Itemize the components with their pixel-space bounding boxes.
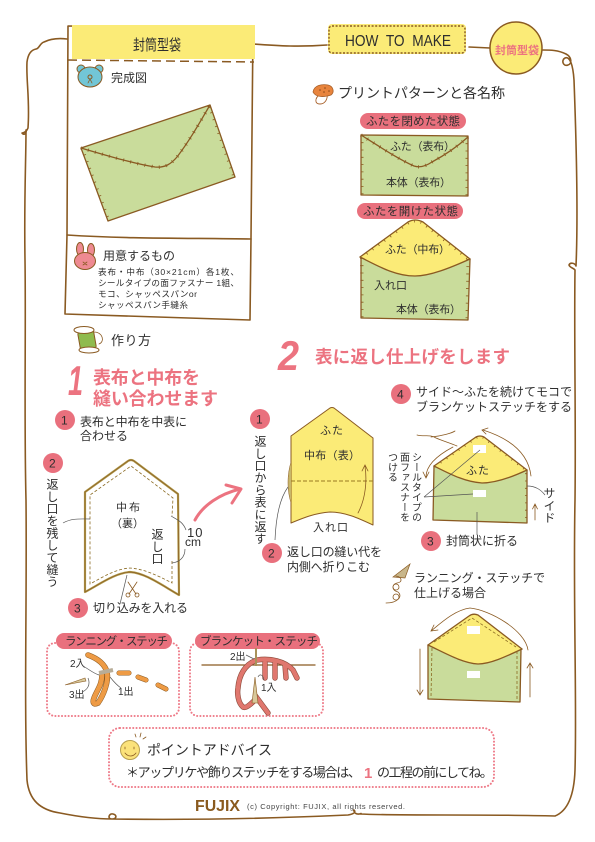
materials list: 表布・中布（30×21cm）各1枚、 xyxy=(98,266,239,277)
icon: thread spool xyxy=(74,326,102,353)
panel: materials and finished view xyxy=(65,25,255,320)
diagram: flap open xyxy=(360,220,470,320)
panel: blanket stitch: 1入 xyxy=(261,683,277,694)
step 1-3 instruction xyxy=(68,598,188,618)
panel: point advice: 1 xyxy=(364,765,372,782)
step 1-2 instruction xyxy=(43,453,63,588)
diagram: blanket stitched envelope: 面ファスナーを xyxy=(398,452,410,522)
step 2-4 instruction: サイド〜ふたを続けてモコで xyxy=(416,385,572,399)
diagram: flap open: 本体（表布） xyxy=(396,302,461,316)
how to make badge: HOW TO MAKE xyxy=(345,33,451,50)
blanket stitch thread xyxy=(238,648,297,713)
panel: running stitch xyxy=(47,633,179,716)
icon: mushroom xyxy=(313,85,333,104)
step 2-4 instruction: 4 xyxy=(397,388,404,402)
diagram: stitched lining: 10 xyxy=(187,525,203,540)
step 2-2 instruction xyxy=(262,543,382,574)
diagram: blanket stitched envelope: ふた xyxy=(466,464,489,477)
step 2-1 instruction: 返し口から表に返す xyxy=(253,435,267,545)
panel: running stitch: 1出 xyxy=(118,686,134,698)
heading: print pattern: プリントパターンと各名称 xyxy=(338,85,505,101)
diagram: turned right side out xyxy=(275,408,373,540)
step 1 numeral: 1 xyxy=(68,357,83,404)
step 1-2 instruction: 2 xyxy=(49,456,56,470)
diagram: stitched lining: 返し口 xyxy=(150,528,164,565)
icon: smiley xyxy=(120,733,146,760)
running stitch finish label: ランニング・ステッチで xyxy=(414,571,545,585)
diagram: blanket stitched envelope: つける xyxy=(386,452,398,482)
panel: running stitch: 2入 xyxy=(70,659,86,670)
panel: blanket stitch: 2出 xyxy=(230,651,246,663)
panel: running stitch: ランニング・ステッチ xyxy=(65,634,168,648)
step 2-2 instruction: 内側へ折りこむ xyxy=(287,559,370,574)
running stitch finish label xyxy=(414,571,545,600)
materials list: シャッペスパン手縫糸 xyxy=(98,299,188,310)
heading: how to make: 作り方 xyxy=(111,333,151,348)
diagram: flap closed: 本体（表布） xyxy=(386,175,451,189)
heading: finished view: 完成図 xyxy=(111,71,147,85)
step 1-1 instruction: 1 xyxy=(61,414,68,428)
materials list: シールタイプの面ファスナー 1組、 xyxy=(98,277,239,288)
diagram: stitched lining: （裏） xyxy=(111,517,144,530)
step 2 numeral: 2 xyxy=(277,332,299,379)
step 1-3 instruction: 3 xyxy=(74,602,81,616)
diagram: stitched lining xyxy=(63,460,203,604)
step 1 heading: 縫い合わせます xyxy=(93,389,218,409)
icon: bear xyxy=(77,65,103,87)
step 2-3 instruction: 封筒状に折る xyxy=(446,533,518,548)
panel: blanket stitch: ブランケット・ステッチ xyxy=(200,634,318,648)
panel: point advice: の工程の前にしてね。 xyxy=(377,765,493,780)
label: flap open: ふたを開けた状態 xyxy=(363,204,458,218)
materials list xyxy=(98,266,239,310)
diagram: blanket stitched envelope xyxy=(386,428,556,535)
arrow: step 1 to step 2 xyxy=(195,485,241,520)
panel: running stitch: 3出 xyxy=(69,689,85,701)
diagram: turned right side out: 入れ口 xyxy=(313,521,348,534)
icon: needle and thread xyxy=(386,564,410,603)
step 2-4 instruction: ブランケットステッチをする xyxy=(416,399,572,414)
step 2-1 instruction xyxy=(250,409,270,545)
step 2-4 instruction xyxy=(391,384,572,414)
panel: point advice xyxy=(109,728,494,787)
panel header: envelope bag title: 封筒型袋 xyxy=(133,37,181,54)
diagram: blanket stitched envelope: シールタイプの xyxy=(410,452,422,522)
icon: rabbit xyxy=(74,242,96,270)
step 2-3 instruction: 3 xyxy=(427,534,434,548)
step 1-3 instruction: 切り込みを入れる xyxy=(93,601,188,615)
step 2 heading: 表に返し仕上げをします xyxy=(315,347,510,367)
diagram: turned right side out: 中布（表） xyxy=(304,449,360,462)
panel: point advice: ポイントアドバイス xyxy=(147,742,272,758)
step 1 heading: 表布と中布を xyxy=(93,368,200,388)
step 2-3 instruction xyxy=(421,531,518,551)
panel header: envelope bag title xyxy=(72,25,255,59)
diagram: stitched lining: cm xyxy=(185,535,201,549)
diagram: blanket stitched envelope: サイド xyxy=(542,487,556,524)
diagram: flap open: ふた（中布） xyxy=(385,243,450,256)
envelope bag circular badge: 封筒型袋 xyxy=(495,43,539,57)
step 1-1 instruction: 合わせる xyxy=(80,429,128,443)
finished envelope illustration xyxy=(81,105,235,221)
step 2-1 instruction: 1 xyxy=(256,412,263,426)
icon: scissors xyxy=(126,582,139,597)
diagram: turned right side out: ふた xyxy=(320,424,343,437)
step 2-2 instruction: 返し口の縫い代を xyxy=(287,544,382,559)
label: flap closed xyxy=(360,113,466,129)
step 1-1 instruction xyxy=(55,410,187,443)
diagram: flap closed xyxy=(361,135,468,196)
materials list: モコ、シャッペスパンor xyxy=(98,289,197,299)
diagram: flap closed: ふた（表布） xyxy=(390,140,455,153)
diagram: stitched lining: 中布 xyxy=(116,501,140,514)
label: flap closed: ふたを閉めた状態 xyxy=(366,114,460,128)
footer: brand and copyright xyxy=(195,798,405,815)
step 2-2 instruction: 2 xyxy=(268,546,275,560)
footer: brand and copyright: FUJIX xyxy=(195,798,240,815)
label: flap open xyxy=(357,203,463,219)
running stitch finish label: 仕上げる場合 xyxy=(414,586,486,600)
diagram: flap open: 入れ口 xyxy=(374,279,407,292)
heading: materials: 用意するもの xyxy=(103,249,175,263)
panel: blanket stitch xyxy=(190,633,323,716)
step 1 heading xyxy=(93,368,218,409)
footer: brand and copyright: (c) Copyright: FUJIX, all rights reserved. xyxy=(247,802,405,811)
step 1-1 instruction: 表布と中布を中表に xyxy=(80,414,187,429)
running stitch thread xyxy=(65,655,166,704)
how to make badge xyxy=(328,24,466,54)
diagram: running stitch envelope xyxy=(417,608,533,702)
envelope bag circular badge xyxy=(490,22,542,74)
panel: point advice: ＊アップリケや飾りステッチをする場合は、 xyxy=(126,765,361,780)
step 1-2 instruction: 返し口を残して縫う xyxy=(45,478,59,588)
